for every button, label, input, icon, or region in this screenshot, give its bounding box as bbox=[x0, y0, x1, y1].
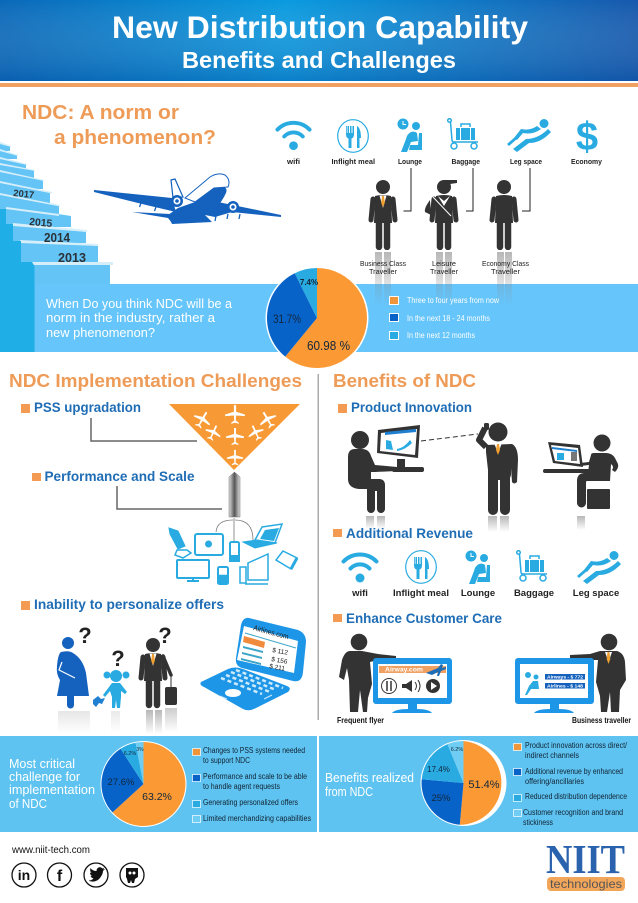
pie chart: benefits realized: 51.4% bbox=[468, 779, 500, 791]
pie chart: critical challenge: 3% bbox=[136, 747, 144, 753]
laptop with fares: Airlines.com bbox=[252, 623, 290, 641]
figure: child: ? bbox=[111, 646, 125, 671]
panel: benefits bbox=[333, 370, 631, 725]
legend: benefits realized: offering/ancillaries bbox=[525, 777, 584, 786]
pie legend bbox=[390, 296, 499, 340]
icons: additional revenue: Baggage bbox=[514, 588, 554, 599]
icon: airplane bbox=[94, 174, 281, 224]
staircase: 2017 bbox=[13, 188, 35, 201]
legend: critical challenge: Changes to PSS systems needed bbox=[203, 746, 305, 755]
pie chart: critical challenge bbox=[100, 741, 186, 827]
legend: benefits realized: indirect channels bbox=[525, 751, 579, 760]
icon labels: wifi bbox=[286, 157, 300, 166]
question text: When Do you think NDC will be a bbox=[46, 296, 233, 311]
panel: implementation challenges bbox=[9, 370, 306, 734]
icon: wifi bbox=[277, 123, 310, 150]
traveller labels: Traveller bbox=[430, 267, 458, 276]
icons: additional revenue bbox=[344, 550, 621, 599]
pie chart: critical challenge: 63.2% bbox=[142, 791, 172, 803]
icons: additional revenue: Inflight meal bbox=[393, 588, 449, 599]
staircase: 2013 bbox=[58, 251, 86, 265]
divider bbox=[318, 374, 319, 720]
pie chart: when NDC becomes a norm: 7.4% bbox=[300, 278, 318, 287]
figure: man with suitcase bbox=[141, 623, 177, 705]
question text bbox=[46, 296, 233, 340]
devices bbox=[169, 524, 297, 584]
pie chart: benefits realized: 17.4% bbox=[427, 765, 450, 774]
laptop with fares: $ 156 bbox=[271, 656, 288, 666]
funnel of planes bbox=[169, 404, 300, 470]
icon labels: Baggage bbox=[452, 157, 480, 166]
social icons bbox=[12, 863, 144, 887]
icon: leg space bbox=[507, 119, 551, 152]
pie chart: benefits realized: 25% bbox=[431, 793, 451, 804]
legend: critical challenge: Performance and scale to be able bbox=[203, 772, 307, 781]
legend: benefits realized bbox=[514, 741, 628, 827]
legend: critical challenge bbox=[192, 746, 311, 823]
connector: PSS bbox=[91, 418, 197, 441]
figure: pregnant woman: ? bbox=[78, 623, 92, 648]
icons: additional revenue: Leg space bbox=[573, 588, 619, 599]
label: critical challenge: Most critical bbox=[9, 757, 75, 771]
legend: benefits realized: stickiness bbox=[523, 818, 553, 827]
pie chart: benefits realized bbox=[420, 740, 506, 826]
icons: additional revenue: Lounge bbox=[461, 588, 495, 599]
traveller labels: Leisure bbox=[432, 259, 456, 268]
pie chart: critical challenge: 27.6% bbox=[108, 777, 135, 788]
icons: additional revenue: wifi bbox=[351, 588, 368, 599]
figure: man on phone bbox=[479, 422, 518, 515]
legend: critical challenge: to support NDC bbox=[203, 756, 250, 765]
figure reflections bbox=[58, 708, 177, 734]
header band bbox=[0, 0, 638, 87]
label: critical challenge: challenge for bbox=[9, 770, 80, 784]
question band bbox=[35, 284, 638, 352]
figure: seated man at monitor bbox=[348, 425, 424, 513]
heading: NDC norm or phenomenon: a phenomenon? bbox=[54, 127, 216, 149]
figure: pregnant woman bbox=[57, 623, 92, 708]
pipe bbox=[216, 472, 253, 541]
icon labels: Leg space bbox=[510, 157, 542, 166]
figure: man at laptop bbox=[543, 434, 618, 509]
icon: inflight meal bbox=[338, 120, 368, 152]
icon labels bbox=[286, 157, 603, 166]
heading: NDC norm or phenomenon: NDC: A norm or bbox=[22, 102, 179, 124]
icon: twitter bbox=[84, 863, 108, 887]
pie chart: when NDC becomes a norm: 31.7% bbox=[273, 314, 301, 326]
panel: critical challenge chart bbox=[0, 736, 317, 832]
legend: critical challenge: Limited merchandizing capabilities bbox=[203, 814, 311, 823]
frequent flyer with monitor: Airway.com bbox=[385, 668, 423, 674]
icon: lounge bbox=[398, 118, 422, 152]
pie legend: In the next 18 - 24 months bbox=[407, 314, 490, 323]
pie chart: critical challenge: 6.2% bbox=[124, 751, 136, 757]
item: product innovation: Product Innovation bbox=[351, 399, 472, 415]
label: critical challenge: implementation bbox=[9, 783, 95, 797]
item: enhance customer care: Enhance Customer Care bbox=[346, 610, 502, 626]
icon labels: Lounge bbox=[398, 157, 422, 166]
icon: dollar: $ bbox=[576, 115, 598, 159]
pie chart: when NDC becomes a norm bbox=[266, 266, 368, 370]
label: critical challenge bbox=[9, 757, 95, 811]
frequent flyer with monitor bbox=[339, 634, 452, 713]
business traveller bbox=[371, 180, 395, 247]
legend: benefits realized: Customer recognition and brand bbox=[523, 808, 623, 817]
traveller labels: Business Class bbox=[360, 259, 406, 268]
panel: benefits realized chart bbox=[319, 736, 638, 832]
label: benefits realized: from NDC bbox=[325, 785, 373, 799]
item: PSS upgradation: PSS upgradation bbox=[34, 399, 141, 415]
staircase bbox=[0, 142, 113, 352]
laptop with fares bbox=[200, 618, 306, 710]
heading: benefits of NDC: Benefits of NDC bbox=[333, 370, 476, 391]
figure: child bbox=[93, 646, 130, 708]
laptop with fares: $ 211 bbox=[269, 663, 286, 673]
economy traveller bbox=[492, 180, 516, 247]
staircase: 2015 bbox=[29, 216, 53, 230]
connector lines bbox=[404, 168, 530, 211]
figure reflections bbox=[375, 252, 512, 306]
label: frequent flyer: Frequent flyer bbox=[337, 716, 384, 725]
icon row: ancillaries bbox=[277, 115, 603, 166]
question text: norm in the industry, rather a bbox=[46, 310, 216, 325]
legend: critical challenge: Generating personalized offers bbox=[203, 798, 298, 807]
business traveller with monitor bbox=[515, 634, 626, 713]
connector: performance bbox=[117, 486, 222, 509]
label: benefits realized bbox=[325, 771, 414, 799]
traveller labels: Traveller bbox=[369, 267, 397, 276]
title: New Distribution Capability bbox=[112, 9, 528, 45]
heading: implementation challenges: NDC Implementation Challenges bbox=[9, 370, 302, 391]
label: critical challenge: of NDC bbox=[9, 797, 47, 811]
dashed phone connection bbox=[421, 434, 478, 441]
figure reflections bbox=[366, 516, 585, 532]
legend: critical challenge: to handle agent requests bbox=[203, 782, 280, 791]
business traveller with monitor: Airways - $ 772 bbox=[547, 674, 584, 680]
icon: slideshare bbox=[120, 863, 144, 887]
legend: benefits realized: Additional revenue by enhanced bbox=[525, 767, 623, 776]
icon: linkedin: in bbox=[18, 867, 30, 883]
traveller labels bbox=[360, 259, 529, 276]
icon: facebook: f bbox=[57, 868, 63, 885]
pie legend: Three to four years from now bbox=[407, 296, 499, 305]
item: performance and scale: Performance and Scale bbox=[44, 468, 195, 484]
logo: NIIT technologies: technologies bbox=[550, 877, 622, 891]
figure: man with suitcase: ? bbox=[158, 623, 172, 648]
legend: benefits realized: Product innovation across direct/ bbox=[525, 741, 628, 750]
website url: www.niit-tech.com bbox=[11, 845, 90, 856]
item: inability to personalize: Inability to personalize offers bbox=[34, 596, 224, 612]
traveller labels: Traveller bbox=[491, 267, 520, 276]
icon labels: Inflight meal bbox=[332, 157, 375, 166]
traveller labels: Economy Class bbox=[482, 259, 529, 268]
traveller figures bbox=[360, 168, 530, 306]
laptop with fares: $ 112 bbox=[272, 647, 289, 657]
pie chart: benefits realized: 6.2% bbox=[451, 747, 463, 753]
icon: baggage bbox=[448, 119, 478, 149]
question text: new phenomenon? bbox=[46, 325, 155, 340]
pie chart: when NDC becomes a norm: 60.98 % bbox=[307, 339, 350, 353]
label: benefits realized: Benefits realized bbox=[325, 771, 414, 785]
icon labels: Economy bbox=[571, 157, 603, 166]
leisure traveller bbox=[425, 180, 457, 247]
subtitle: Benefits and Challenges bbox=[182, 47, 456, 73]
business traveller with monitor: Airlines - $ 148 bbox=[547, 684, 584, 688]
logo: NIIT technologies: NIIT bbox=[546, 836, 625, 882]
heading: NDC norm or phenomenon bbox=[22, 102, 216, 149]
pie legend: In the next 12 months bbox=[407, 331, 475, 340]
item: additional revenue: Additional Revenue bbox=[346, 525, 473, 541]
staircase: 2014 bbox=[44, 231, 70, 245]
